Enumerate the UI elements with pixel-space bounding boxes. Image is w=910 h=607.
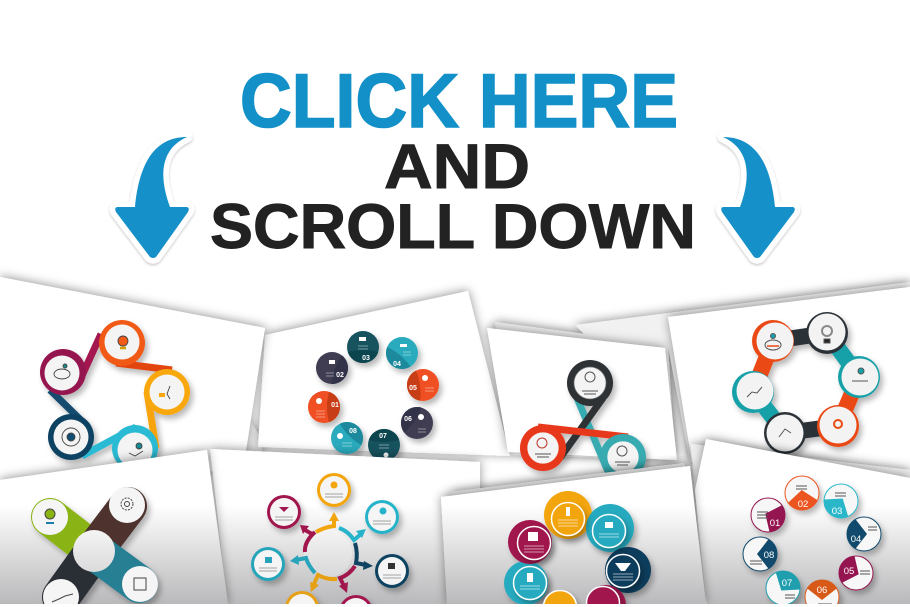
- text lines in step discs: [750, 486, 877, 604]
- step numbers: 08: [764, 550, 774, 561]
- diagram: hub with seven arrows: [251, 473, 409, 607]
- step numbers: 04: [851, 534, 861, 545]
- disc numbers and white pictograms: [316, 337, 428, 458]
- panel: top sheet three: [487, 328, 677, 480]
- line pictograms: [747, 326, 868, 437]
- heading: SCROLL DOWN: SCROLL DOWN: [210, 192, 696, 262]
- panel: top sheet four: [668, 287, 910, 470]
- bottom white strip: [0, 604, 910, 607]
- disc numbers and white pictograms: 05: [409, 385, 417, 392]
- panel: bottom sheet eight: [691, 439, 910, 607]
- disc numbers and white pictograms: 06: [404, 416, 412, 423]
- panel: bottom sheet six: [210, 449, 480, 607]
- step numbers: 07: [782, 578, 792, 589]
- disc numbers and white pictograms: 07: [379, 433, 387, 440]
- disc numbers and white pictograms: 08: [349, 428, 357, 435]
- centre circle: [73, 530, 115, 572]
- seven curved arrows: [296, 518, 366, 586]
- panel: bottom sheet five: [0, 450, 228, 607]
- diagram: three linked rings: [520, 360, 646, 480]
- step numbers: 03: [832, 506, 842, 517]
- step numbers: 01: [770, 518, 780, 529]
- title: CLICK HERE: CLICK HERE: [240, 59, 678, 144]
- hub circle: [304, 529, 352, 577]
- panel: top sheet two: [258, 291, 510, 461]
- step numbers: [764, 499, 861, 596]
- white pictograms and text lines: [527, 507, 631, 582]
- heading: AND: AND: [384, 132, 530, 202]
- arrow: left: [115, 137, 189, 258]
- arrow: right: [721, 137, 795, 258]
- line pictograms: [54, 336, 170, 456]
- diagram: X shape with four arms: [32, 487, 158, 607]
- diagram: eight step wedges: [743, 476, 881, 607]
- disc numbers and white pictograms: 02: [336, 372, 344, 379]
- panel: bottom sheet seven: [441, 463, 706, 607]
- diagram: five-point ribbon of rings: [40, 320, 190, 471]
- diagram: eight numbered discs: [308, 331, 439, 461]
- step numbers: 05: [844, 566, 854, 577]
- diagram: six linked circles ring: [732, 312, 880, 454]
- diagram: eight layered discs: [504, 491, 651, 607]
- panel: back sheets of the top row: [245, 282, 910, 462]
- panel: top sheet one: [0, 277, 265, 480]
- disc numbers and white pictograms: 04: [393, 361, 401, 368]
- disc numbers and white pictograms: 03: [362, 355, 370, 362]
- step numbers: 02: [798, 499, 808, 510]
- pictograms in arrow circles: [265, 482, 395, 569]
- step numbers: 06: [817, 585, 827, 596]
- disc numbers and white pictograms: 01: [331, 402, 339, 409]
